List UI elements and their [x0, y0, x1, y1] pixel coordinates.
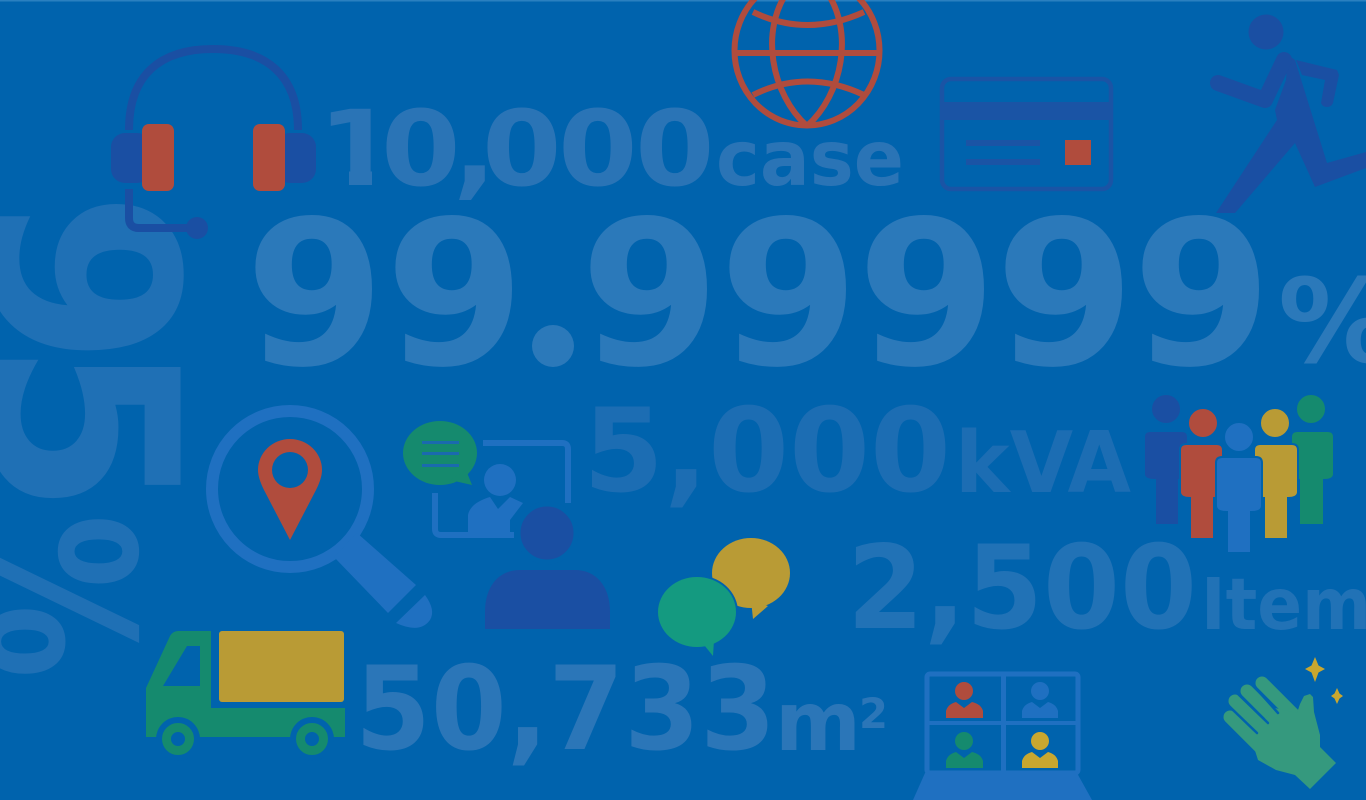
number: 10,000 case: [318, 89, 904, 210]
icon: chat bubbles: [656, 538, 790, 656]
rotated number: 95%: [0, 191, 232, 679]
number: 50,733 m2: m: [775, 675, 861, 770]
number: 5,000 kVA: [583, 384, 1131, 519]
icon: credit card: [942, 79, 1111, 189]
icon: waving hand with sparkles: [1230, 657, 1343, 789]
icon: globe: [734, 0, 880, 126]
icon: delivery truck: [146, 631, 345, 761]
icon: video presenter with speech bubble: [403, 421, 568, 535]
icon: running person: [1216, 14, 1366, 213]
number: 10,000 case: 0,000: [381, 89, 715, 210]
icon: person silhouette: [485, 504, 610, 629]
number: 10,000 case: 1: [318, 89, 397, 210]
number: 5,000 kVA: 5,000: [583, 384, 951, 519]
number: 10,000 case: case: [716, 115, 904, 204]
number: 50,733 m2: 50,733: [355, 642, 776, 777]
icon: laptop with video call: [913, 674, 1092, 800]
number: 50,733 m2: 2: [859, 689, 888, 738]
icon: magnifier with map pin: [212, 411, 432, 628]
number: 5,000 kVA: kVA: [955, 414, 1131, 513]
number: 2,500 Item: 2,500: [847, 521, 1197, 656]
icon: group of people: [1144, 394, 1334, 553]
number: 99.99999%: 99.99999: [245, 178, 1272, 412]
icon: headset: [111, 49, 316, 239]
